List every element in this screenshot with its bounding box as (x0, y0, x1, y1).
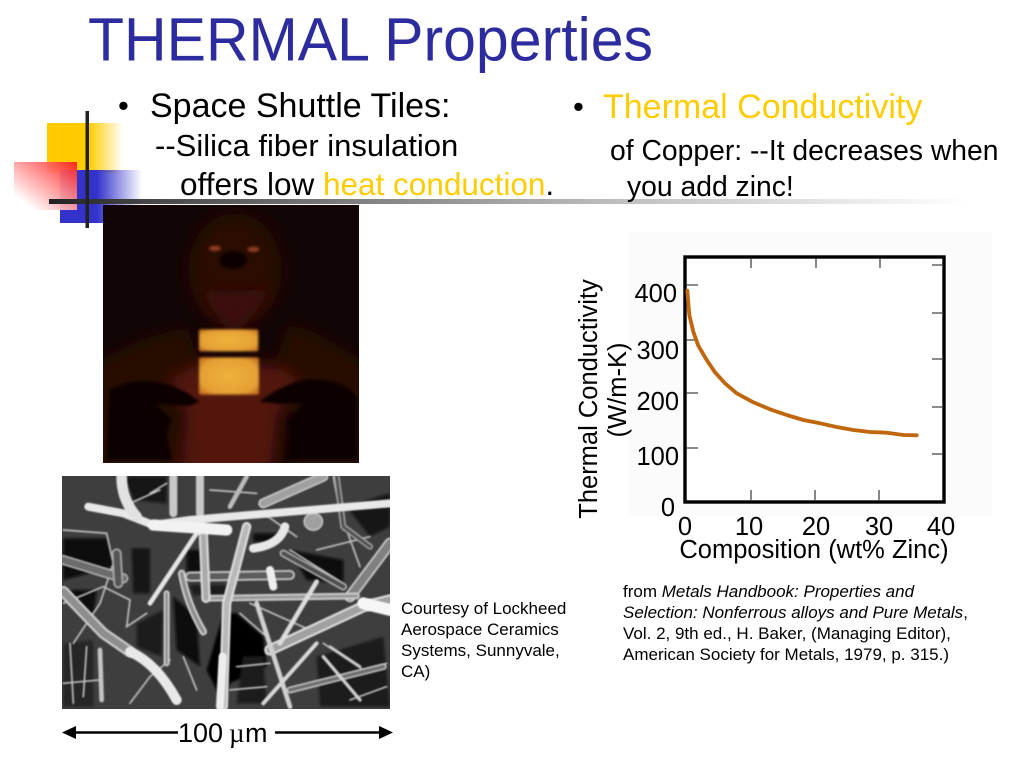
axis values: 10 (735, 513, 763, 541)
title: THERMAL Properties (88, 5, 653, 74)
right bullet text: you add zinc! (627, 170, 794, 202)
ticks (686, 258, 943, 501)
left bullet text: Space Shuttle Tiles: (150, 87, 451, 125)
caption: image courtesy: Systems, Sunnyvale, (401, 641, 560, 660)
caption: chart source: Selection: Nonferrous alloys and Pure Metals, (623, 603, 968, 622)
scale bar: 100 micrometres: 100 (178, 718, 223, 748)
axis values: (W/m-K) (604, 343, 632, 437)
thin bright network (63, 477, 387, 703)
right bullet text (573, 88, 998, 202)
medium tubes (63, 560, 123, 578)
left bullet text: • (118, 88, 129, 123)
caption: image courtesy (401, 599, 566, 681)
right bullet text: of Copper: --It decreases when (610, 134, 998, 166)
axis values: 100 (636, 443, 679, 471)
axis values: 400 (634, 280, 677, 308)
axis values: 40 (927, 513, 955, 541)
caption: image courtesy: CA) (401, 662, 430, 681)
photo: SEM micrograph of silica fibers (62, 476, 390, 709)
scale bar: 100 micrometres: µ (229, 718, 245, 748)
right bullet text: • (573, 89, 584, 124)
axis values (575, 279, 955, 564)
left bullet text (118, 87, 554, 202)
right bullet text: Thermal Conductivity (603, 88, 922, 126)
caption: chart source: Vol. 2, 9th ed., H. Baker, (Managing Editor), (623, 624, 951, 643)
axis values: 20 (802, 513, 830, 541)
caption: chart source (623, 582, 968, 664)
caption: chart source: from Metals Handbook: Properties and (623, 582, 914, 601)
left bullet text: --Silica fiber insulation (155, 128, 458, 163)
axis values: Thermal Conductivity (575, 279, 603, 519)
axis values: 300 (636, 337, 679, 365)
axis values: 200 (636, 388, 679, 416)
thin bright rods (280, 582, 317, 643)
curve (687, 291, 917, 435)
scale bar: 100 micrometres: m (245, 718, 268, 748)
left bullet text: offers low heat conduction. (180, 166, 554, 202)
photo: glowing silica tile held by a person (103, 205, 359, 463)
axis values: 0 (678, 513, 692, 541)
axis values: Composition (wt% Zinc) (679, 536, 949, 564)
axis values: 0 (661, 494, 675, 522)
caption: image courtesy: Aerospace Ceramics (401, 620, 559, 639)
axis values: 30 (865, 513, 893, 541)
caption: chart source: American Society for Metals, 1979, p. 315.) (623, 645, 949, 664)
caption: image courtesy: Courtesy of Lockheed (401, 599, 566, 618)
